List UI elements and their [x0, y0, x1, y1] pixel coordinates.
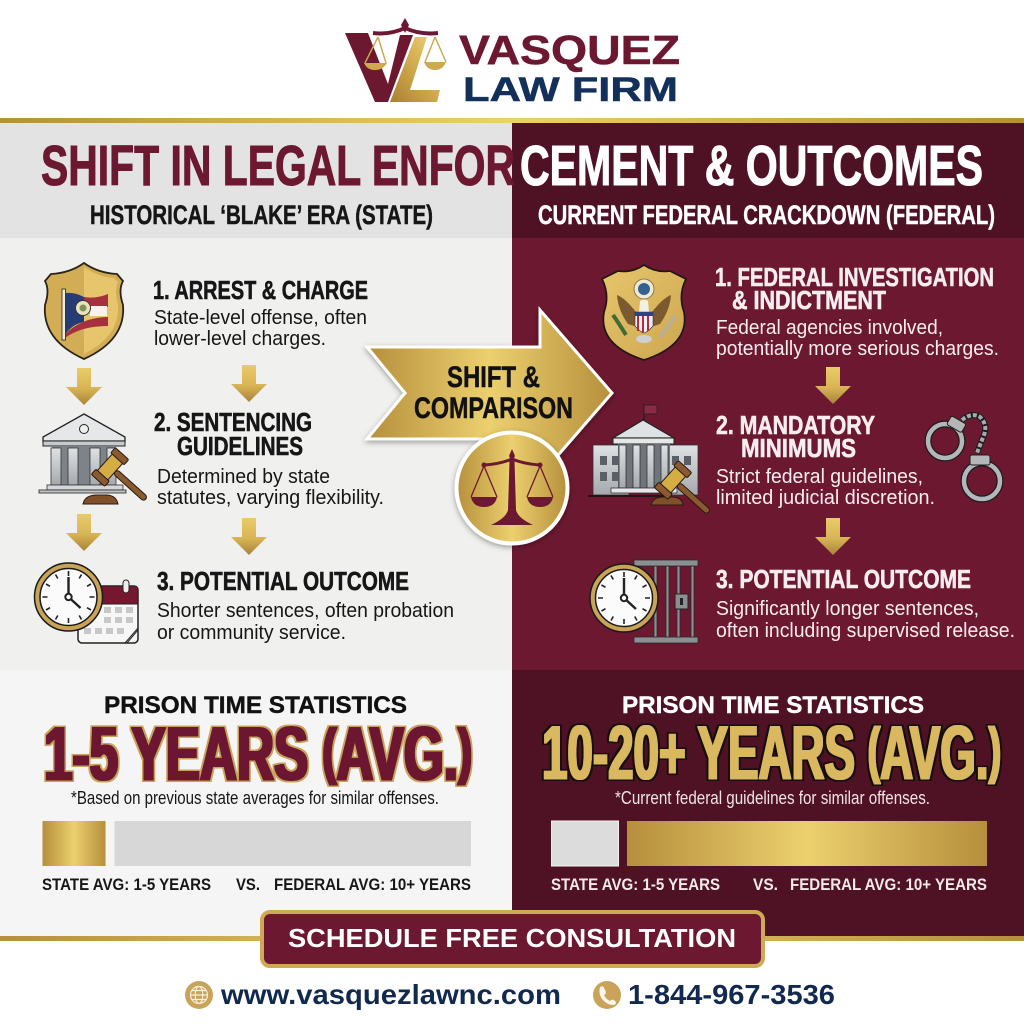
icon: federal eagle badge — [602, 265, 686, 360]
center medallion: scales of justice — [456, 432, 568, 544]
contact: website: www.vasquezlawnc.com — [220, 979, 561, 1010]
footnote: *Based on previous state averages for similar offenses. — [71, 788, 439, 808]
federal step 1 text: Federal agencies involved, — [716, 317, 943, 339]
federal step 3 text: 3. POTENTIAL OUTCOME — [716, 564, 971, 594]
icon: state shield badge with flag — [45, 263, 123, 359]
arrow: text column 2 — [231, 518, 267, 555]
panel: federal process steps — [588, 262, 1015, 643]
bar labels: VS. — [753, 875, 778, 894]
arrow: left column 1 — [66, 368, 102, 405]
icon: clock and calendar — [34, 563, 138, 643]
big number: federal years: ) — [989, 716, 1001, 785]
federal step 3 text: Significantly longer sentences, — [716, 598, 979, 620]
federal step 1 text: & INDICTMENT — [732, 285, 886, 315]
logo mark: VL with scales — [345, 18, 446, 102]
bar labels — [42, 875, 471, 894]
center arrow: shift and comparison — [367, 310, 612, 476]
icon: phone — [593, 981, 621, 1009]
title: SHIFT IN LEGAL ENFOR — [41, 134, 515, 198]
federal step 2 text: Strict federal guidelines, — [716, 466, 923, 488]
federal step 1 text — [715, 262, 999, 360]
icon: globe — [185, 981, 213, 1009]
federal step 1 text: potentially more serious charges. — [716, 338, 999, 360]
bar: state average — [552, 821, 618, 866]
call to action button — [262, 912, 763, 966]
icon: handcuffs — [928, 415, 1000, 499]
bar labels — [551, 875, 987, 894]
big number: state years: ) — [458, 717, 472, 786]
icon: clock and prison bars — [590, 560, 698, 643]
step 2 text: statutes, varying flexibility. — [157, 487, 384, 509]
icon: courthouse with gavel — [39, 414, 158, 512]
federal step 2 text: limited judicial discretion. — [716, 487, 935, 509]
bar labels: VS. — [236, 875, 260, 894]
logo: Vasquez Law Firm — [345, 18, 680, 109]
step 3 text: 3. POTENTIAL OUTCOME — [157, 566, 409, 596]
stats heading: PRISON TIME STATISTICS — [104, 692, 407, 719]
step 2 text: Determined by state — [157, 466, 330, 488]
logo wordmark: LAW FIRM — [463, 71, 678, 109]
center arrow: shift and comparison: SHIFT & — [447, 361, 540, 394]
panel: state process steps — [34, 263, 454, 644]
step 2 text: 2. SENTENCING — [154, 407, 312, 437]
big number: federal years: ( — [868, 716, 880, 785]
icon: federal building with flag and gavel — [588, 404, 721, 525]
step 2 text: GUIDELINES — [177, 431, 303, 461]
step 1 text: lower-level charges. — [154, 328, 326, 350]
bar: state average — [42, 821, 106, 866]
bar labels: FEDERAL AVG: 10+ YEARS — [790, 875, 987, 894]
logo wordmark: VASQUEZ — [459, 27, 680, 73]
arrow: federal step 2 to 3 — [815, 518, 851, 555]
step 3 text: or community service. — [157, 622, 346, 644]
bar labels: FEDERAL AVG: 10+ YEARS — [274, 875, 471, 894]
big number: state years: 1-5 YEARS — [44, 712, 435, 797]
big number: state years: ( — [322, 717, 337, 786]
bar labels: STATE AVG: 1-5 YEARS — [42, 875, 211, 894]
contact: phone: 1-844-967-3536 — [628, 979, 835, 1010]
footnote: *Current federal guidelines for similar offenses. — [615, 788, 930, 808]
federal step 2 text — [716, 410, 935, 509]
step 1 text — [153, 275, 368, 350]
bar: federal average — [627, 821, 987, 866]
federal step 3 text — [716, 564, 1015, 642]
subtitle: state era: HISTORICAL ‘BLAKE’ ERA (STATE) — [90, 200, 433, 230]
step 1 text: 1. ARREST & CHARGE — [153, 275, 368, 305]
stats heading: PRISON TIME STATISTICS — [622, 692, 924, 719]
step 3 text: Shorter sentences, often probation — [157, 600, 454, 622]
bar: federal average — [114, 821, 471, 866]
step 3 text — [157, 566, 454, 644]
bar labels: STATE AVG: 1-5 YEARS — [551, 875, 720, 894]
panel: state prison statistics — [42, 692, 472, 894]
panel: federal prison statistics — [542, 692, 1001, 894]
step 2 text — [154, 407, 384, 509]
center arrow: shift and comparison: COMPARISON — [414, 392, 573, 425]
big number: state years: AVG. — [336, 712, 458, 797]
arrow: text column 1 — [231, 365, 267, 402]
arrow: left column 2 — [66, 514, 102, 551]
arrow: federal step 1 to 2 — [815, 367, 851, 404]
federal step 2 text: 2. MANDATORY — [716, 410, 875, 440]
call to action button: SCHEDULE FREE CONSULTATION — [288, 923, 736, 953]
logo wordmark — [459, 27, 680, 109]
federal step 3 text: often including supervised release. — [716, 620, 1015, 642]
federal step 2 text: MINIMUMS — [741, 433, 856, 463]
step 1 text: State-level offense, often — [154, 307, 367, 329]
